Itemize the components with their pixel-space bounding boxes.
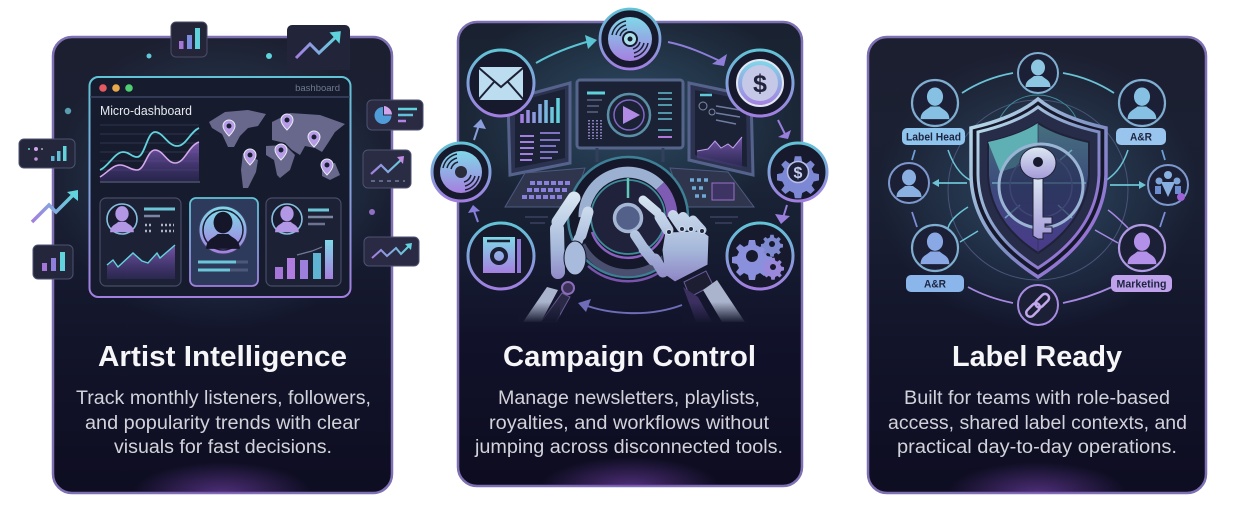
node: gear with dollar <box>769 143 827 201</box>
description: Manage newsletters, playlists, <box>498 388 760 409</box>
icon: floating trend arrow <box>32 190 78 222</box>
node: gear with dollar: $ <box>794 165 803 182</box>
description: Built for teams with role-based <box>904 388 1170 409</box>
window tab label: bashboard <box>295 83 340 94</box>
label: A&R bottom: A&R <box>924 278 946 290</box>
label: Marketing <box>1111 275 1172 292</box>
dashboard window <box>90 77 350 297</box>
description: Track monthly listeners, followers, <box>76 388 371 409</box>
halo behind monitors <box>492 24 769 174</box>
bottom glow <box>956 465 1118 493</box>
description <box>888 388 1187 458</box>
icon tile: pie and legend <box>367 100 423 130</box>
halo behind shield <box>878 50 1198 330</box>
card background <box>868 37 1206 493</box>
arrow right <box>1110 181 1146 189</box>
description <box>474 388 783 458</box>
traffic light dots <box>99 84 133 92</box>
node: royalties coin: $ <box>753 70 767 98</box>
window title bar line <box>90 96 350 98</box>
network arcs <box>912 73 1165 303</box>
node: label head <box>912 80 958 126</box>
description: royalties, and workflows without <box>489 413 770 434</box>
world map with pins <box>209 110 345 188</box>
title: Label Ready <box>952 341 1122 373</box>
label: Label Head <box>902 128 965 145</box>
icon tile: bottom left bar chart <box>33 245 73 279</box>
window frame <box>90 77 350 297</box>
left monitor <box>508 83 570 175</box>
description: jumping across disconnected tools. <box>474 437 783 458</box>
right monitor <box>689 83 753 175</box>
bottom glow <box>140 465 303 493</box>
node: workflow gears <box>727 223 793 289</box>
faint inner rings <box>948 95 1128 280</box>
panel: Label Ready card <box>868 37 1206 508</box>
title: Campaign Control <box>503 341 756 373</box>
panel: Artist Intelligence card <box>52 30 392 508</box>
card background <box>458 22 802 486</box>
node: disc left <box>432 143 490 201</box>
node: playlist disc top <box>600 9 660 69</box>
profile card right <box>266 198 341 286</box>
label: Label Head: Label Head <box>906 132 961 144</box>
node: left member <box>889 163 929 203</box>
label: A&R top <box>1116 128 1166 145</box>
line chart <box>100 125 200 182</box>
bottom loop arrow <box>578 299 682 313</box>
shield with key <box>971 99 1106 277</box>
arrow left <box>932 179 967 187</box>
node: newsletter envelope <box>468 50 534 116</box>
halo behind dashboard <box>52 30 392 330</box>
node: A&R bottom <box>912 225 958 271</box>
icon tile: dots and bars <box>19 139 75 168</box>
title: Artist Intelligence <box>98 341 347 373</box>
description: and popularity trends with clear <box>85 413 361 434</box>
icon tile: top right trend arrow <box>287 25 350 70</box>
node: album sleeve <box>468 223 534 289</box>
label: A&R bottom <box>906 275 964 292</box>
node: A&R top <box>1119 80 1165 126</box>
icon tile: top bar chart <box>171 22 207 57</box>
keyboard panel right <box>670 168 754 223</box>
node: royalties coin <box>727 50 793 116</box>
icon tile: small wave trend <box>364 237 419 266</box>
icon tile: trend line with markers <box>363 150 411 188</box>
profile card centre highlighted <box>190 198 258 286</box>
robot hands <box>518 198 748 323</box>
label: Marketing: Marketing <box>1116 278 1166 290</box>
label: A&R top: A&R <box>1130 132 1152 144</box>
keyboard panel left <box>505 168 585 223</box>
node: top member <box>1018 53 1058 93</box>
profile card left <box>100 198 181 286</box>
node: link <box>1018 285 1058 325</box>
flow arrows around the dial <box>468 35 791 224</box>
centre monitor with play button <box>577 80 683 162</box>
card background <box>53 37 392 493</box>
description <box>76 388 371 458</box>
description: access, shared label contexts, and <box>888 413 1187 434</box>
dashboard heading: Micro-dashboard <box>100 104 192 118</box>
control dial <box>568 157 688 281</box>
description: visuals for fast decisions. <box>114 437 332 458</box>
node: team group <box>1148 165 1188 205</box>
panel: Campaign Control card <box>458 0 802 508</box>
floating decorative dots <box>65 53 375 215</box>
node: marketing <box>1119 225 1165 271</box>
bottom glow <box>548 460 711 486</box>
description: practical day-to-day operations. <box>897 437 1177 458</box>
